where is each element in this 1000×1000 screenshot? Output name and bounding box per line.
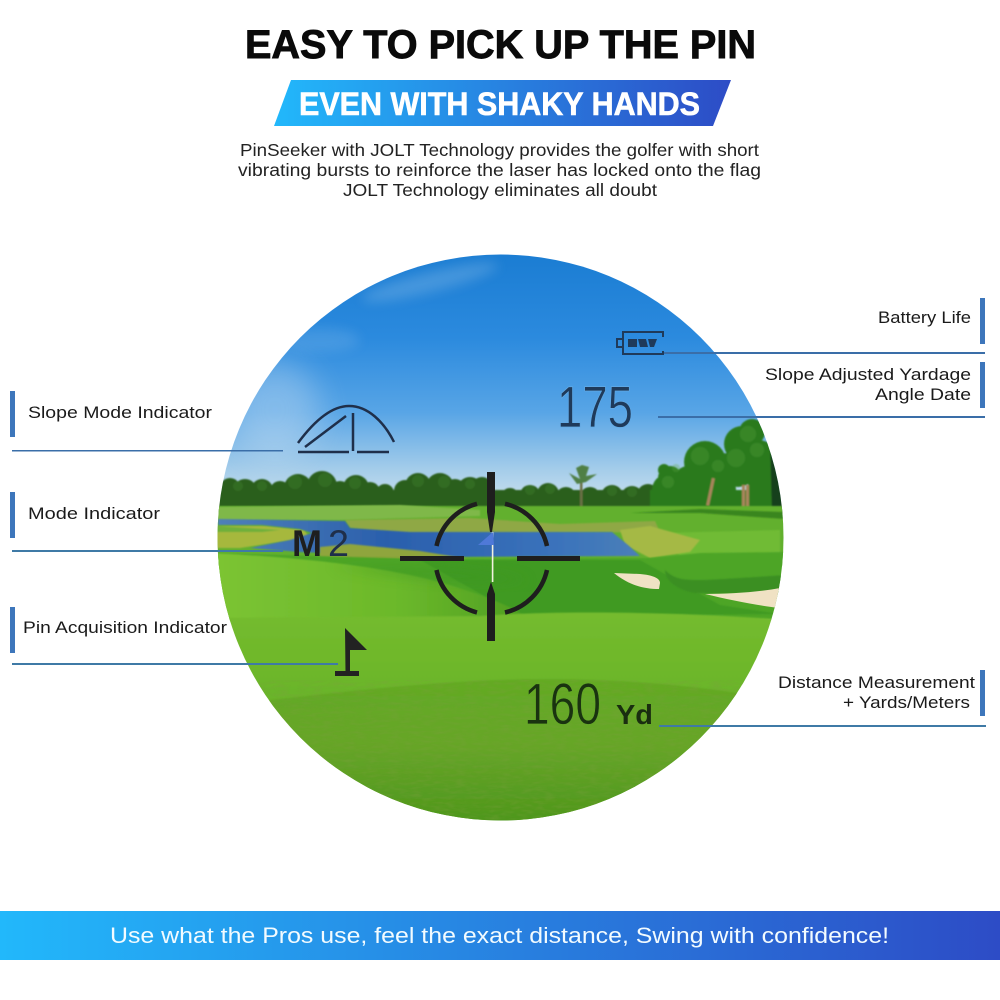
- callout: slope adjusted yardage: Slope Adjusted Yardage: [765, 366, 971, 384]
- intro paragraph: JOLT Technology eliminates all doubt: [343, 180, 657, 200]
- callout: pin acquisition indicator: Pin Acquisition Indicator: [23, 619, 228, 637]
- callout: battery life: Battery Life: [878, 309, 971, 327]
- foreground mound: [268, 680, 738, 820]
- callout: battery life: [664, 298, 985, 354]
- intro paragraph: [238, 140, 761, 200]
- rangefinder view: golf course photo scene: [205, 250, 790, 830]
- grass behind lake: [210, 506, 790, 566]
- crosshair pin flag: [478, 532, 494, 582]
- mode indicator M2: M: [292, 523, 322, 564]
- callout: mode indicator: [10, 492, 283, 552]
- mode indicator M2: 2: [328, 523, 349, 564]
- yardage reading 175: 175: [557, 375, 633, 440]
- tree line: [218, 419, 790, 515]
- unit label Yd: Yd: [616, 699, 653, 730]
- callout: slope mode indicator: [10, 391, 283, 452]
- foreground green: [229, 612, 772, 820]
- reticle crosshair: [400, 472, 580, 641]
- intro paragraph: PinSeeker with JOLT Technology provides the golfer with short: [240, 140, 759, 160]
- distance reading 160: 160: [524, 672, 601, 737]
- grass texture: [262, 680, 740, 820]
- bottom banner: Use what the Pros use, feel the exact distance, Swing with confidence!: [110, 923, 889, 948]
- intro paragraph: vibrating bursts to reinforce the laser has locked onto the flag: [238, 160, 761, 180]
- sky: [210, 250, 790, 500]
- icon: battery: [616, 331, 664, 355]
- subtitle banner: EVEN WITH SHAKY HANDS: [299, 86, 700, 122]
- sand bunkers: [614, 573, 780, 608]
- mid fairway: [210, 552, 790, 620]
- bottom banner: [0, 911, 1000, 960]
- callout: distance measurement: Distance Measurement: [778, 674, 975, 692]
- callout: pin acquisition indicator: [10, 607, 338, 665]
- reeds and banks: [216, 518, 700, 558]
- callout: slope adjusted yardage: Angle Date: [875, 386, 971, 404]
- lake: [218, 519, 640, 557]
- large trees, right: [650, 418, 773, 507]
- callout: distance measurement: + Yards/Meters: [843, 694, 970, 712]
- title: EASY TO PICK UP THE PIN: [245, 23, 756, 67]
- callout: mode indicator: Mode Indicator: [28, 505, 161, 523]
- callout: slope mode indicator: Slope Mode Indicator: [28, 404, 213, 422]
- callout: distance measurement: [659, 670, 986, 727]
- mode indicator M2: [292, 523, 349, 564]
- icon: slope mode: [298, 406, 394, 452]
- callout: slope adjusted yardage: [658, 362, 985, 418]
- icon: pin flag: [335, 628, 367, 676]
- lone tree: [580, 482, 582, 509]
